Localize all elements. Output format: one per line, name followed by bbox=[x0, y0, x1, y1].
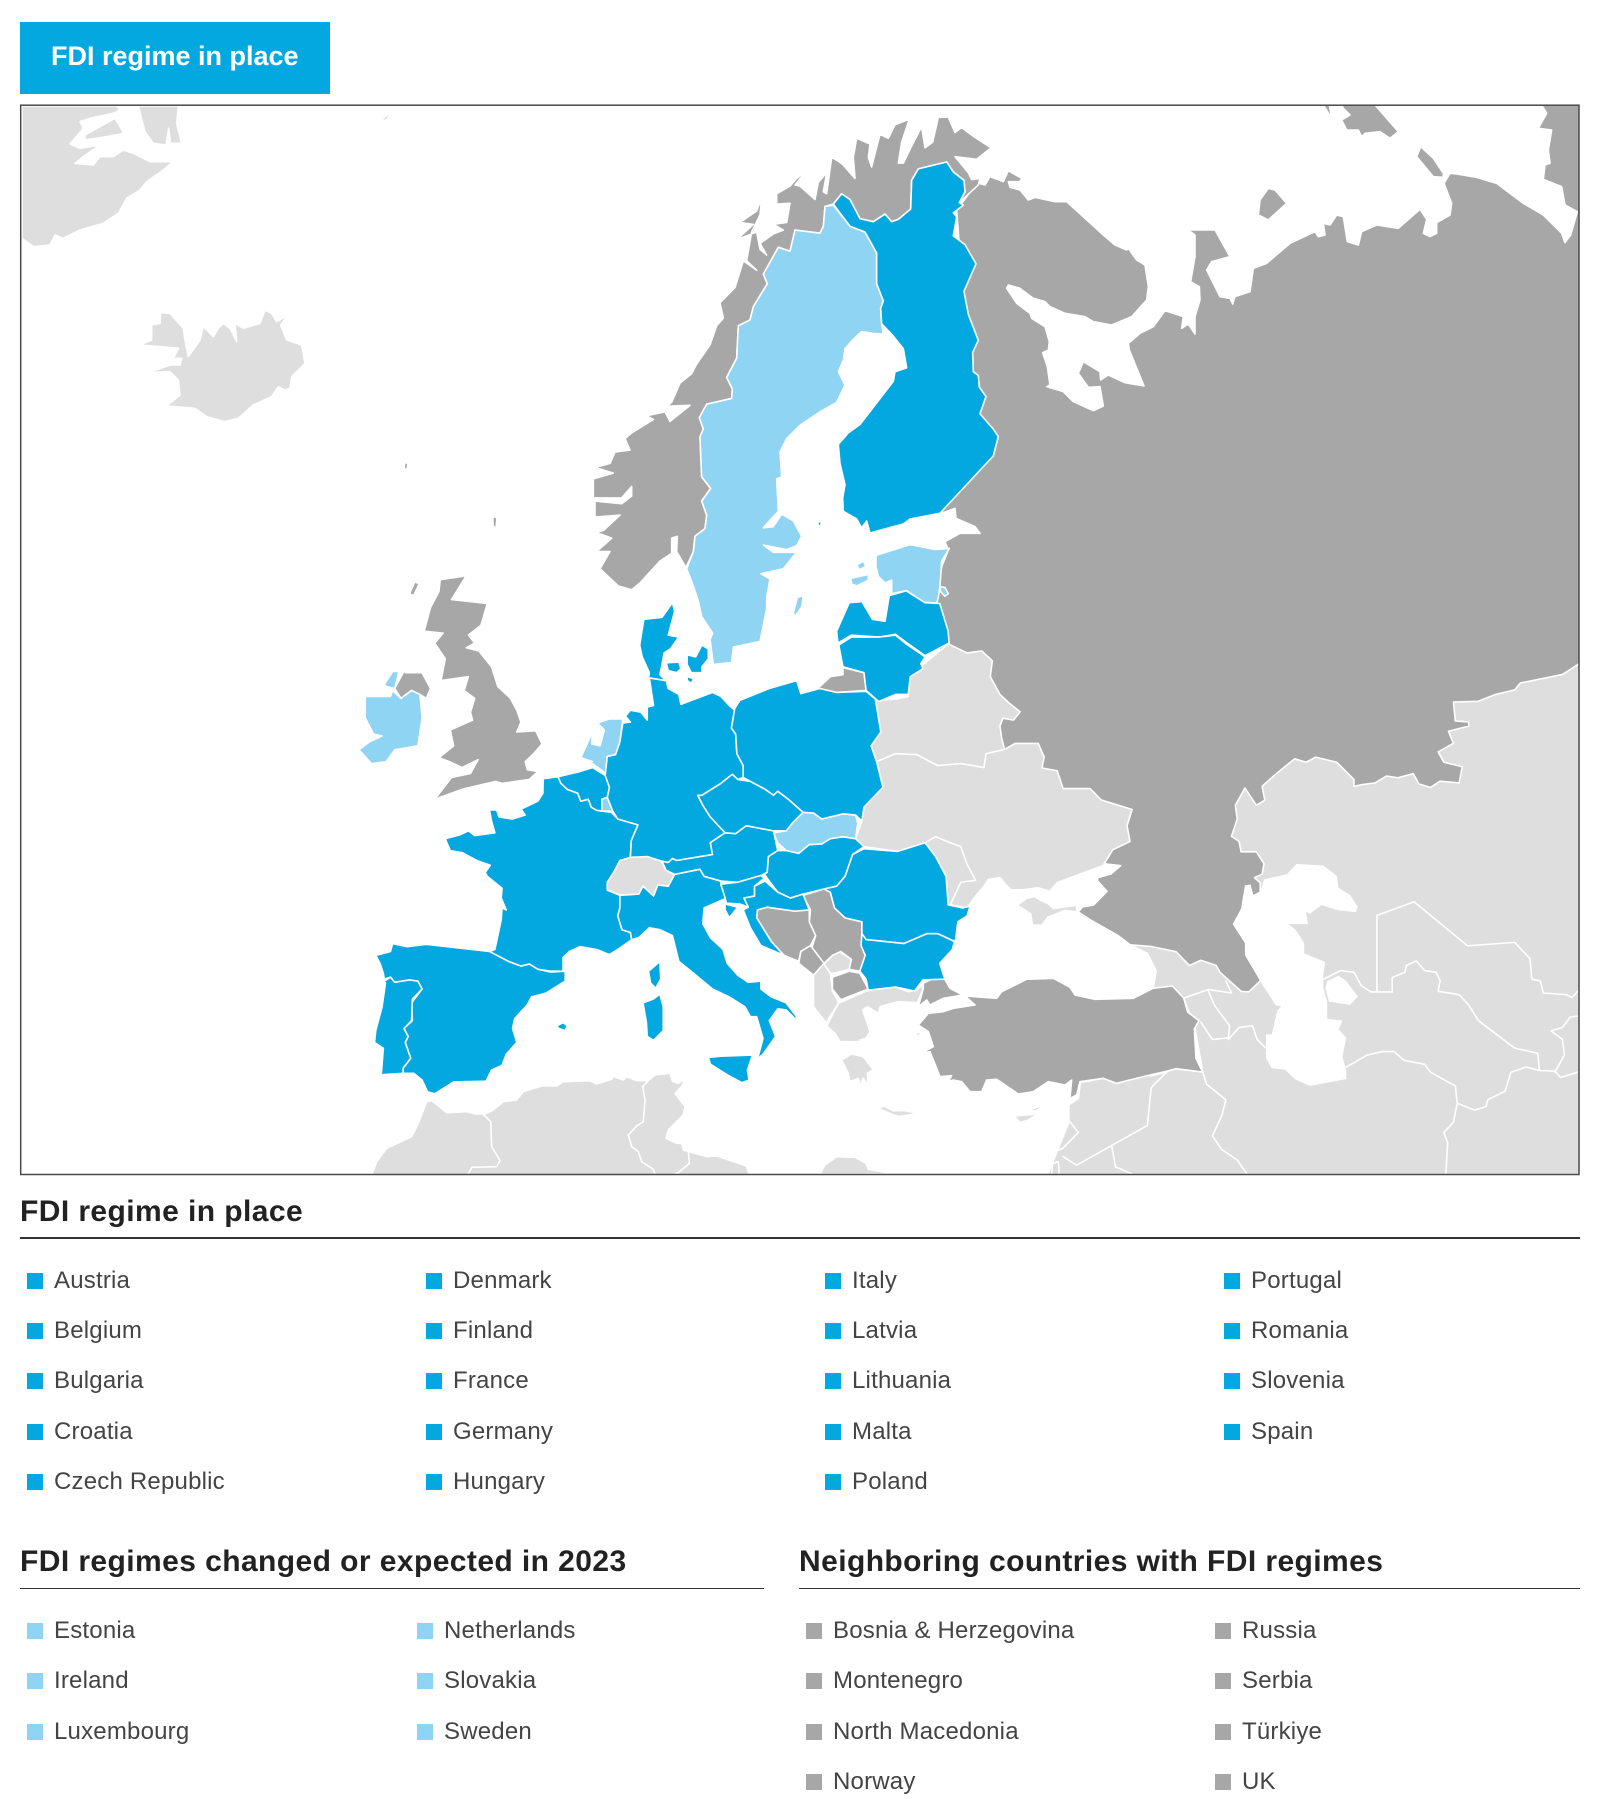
country: Romania bbox=[824, 843, 970, 944]
country: UK bbox=[424, 576, 542, 799]
item: Denmark: Denmark bbox=[453, 1267, 552, 1294]
UK: Hebrides bbox=[410, 582, 418, 594]
country: Luxembourg bbox=[602, 797, 613, 811]
country: Russia bbox=[937, 105, 1579, 1000]
lake: Peipus bbox=[940, 587, 948, 596]
item: Netherlands: Netherlands bbox=[444, 1617, 576, 1644]
country: Belgium bbox=[558, 768, 609, 811]
Ireland: Donegal bbox=[385, 672, 398, 688]
section heading: FDI regime in place: FDI regime in place bbox=[20, 1195, 303, 1228]
item: Slovenia: Slovenia bbox=[1251, 1367, 1345, 1394]
country: Latvia bbox=[837, 591, 949, 656]
Spain: Balearic Islands bbox=[557, 1023, 567, 1031]
Denmark: Zealand bbox=[687, 645, 708, 673]
item: Ireland: Ireland bbox=[54, 1667, 129, 1694]
country: Sweden bbox=[687, 205, 883, 664]
country: Austria bbox=[662, 826, 778, 882]
item: Russia: Russia bbox=[1242, 1617, 1317, 1644]
Sweden: Gotland bbox=[794, 596, 802, 615]
item: France: France bbox=[453, 1367, 529, 1394]
region: Kazakhstan, Central Asia, Caucasus and Middle East bbox=[1048, 663, 1580, 1174]
country: Slovakia bbox=[774, 812, 858, 853]
item: Montenegro: Montenegro bbox=[833, 1667, 963, 1694]
FDI regime in place: EU member states bbox=[375, 591, 970, 1094]
peninsula: Crimea bbox=[1017, 897, 1077, 925]
item: Malta bbox=[825, 1418, 912, 1445]
country: Serbia bbox=[803, 889, 865, 971]
country: Denmark bbox=[640, 603, 679, 681]
item: Slovakia: Slovakia bbox=[444, 1667, 536, 1694]
Greenland bbox=[22, 106, 392, 247]
Denmark: Lolland bbox=[687, 677, 694, 683]
item: Germany: Germany bbox=[453, 1418, 553, 1445]
country: Bosnia and Herzegovina bbox=[757, 907, 816, 961]
item: Finland: Finland bbox=[453, 1317, 533, 1344]
France: Corsica bbox=[649, 961, 661, 988]
section heading: Neighboring countries with FDI regimes: Neighboring countries with FDI regimes bbox=[799, 1545, 1383, 1578]
item: Latvia: Latvia bbox=[852, 1317, 917, 1344]
country: Poland bbox=[731, 681, 883, 821]
item: Bulgaria: Bulgaria bbox=[54, 1367, 144, 1394]
islands: Faroe and Shetland bbox=[404, 462, 497, 528]
Russia: Kaliningrad bbox=[820, 668, 865, 692]
country: Lithuania bbox=[839, 635, 925, 702]
legend: Neighboring countries with FDI regimes bbox=[806, 1617, 1322, 1795]
Estonia: Saaremaa bbox=[852, 576, 868, 586]
borders: Levant bbox=[1052, 1162, 1059, 1174]
country: Portugal bbox=[375, 977, 422, 1075]
map of Europe bbox=[20, 104, 1580, 1176]
country: France bbox=[445, 777, 638, 971]
Estonia: Hiiumaa bbox=[858, 562, 865, 569]
country: Estonia bbox=[876, 545, 949, 603]
country: Czech Republic bbox=[698, 774, 803, 834]
neighboring countries with regime: UK, Serbia, Bosnia, Montenegro, North Macedonia, Kaliningrad bbox=[395, 576, 868, 1000]
country: North Macedonia bbox=[832, 971, 868, 1000]
Denmark: Funen bbox=[666, 662, 681, 673]
Italy: Sardinia bbox=[643, 994, 663, 1040]
item: Croatia: Croatia bbox=[54, 1418, 133, 1445]
country: Netherlands bbox=[582, 720, 622, 772]
countries without regime: Switzerland, Kosovo, Albania bbox=[607, 857, 851, 1023]
FDI changed or expected: Sweden and Estonia bbox=[687, 205, 949, 664]
item: Romania: Romania bbox=[1251, 1317, 1348, 1344]
lake: Caspian Sea bbox=[1233, 864, 1358, 1086]
item: UK: UK bbox=[1242, 1768, 1276, 1795]
country: Montenegro bbox=[799, 946, 824, 975]
Italy: Sicily bbox=[708, 1055, 752, 1083]
divider bbox=[20, 1588, 764, 1589]
item: Portugal: Portugal bbox=[1251, 1267, 1342, 1294]
section heading: FDI regimes changed or expected in 2023: FDI regimes changed or expected in 2023 bbox=[20, 1545, 627, 1578]
item: Belgium: Belgium bbox=[54, 1317, 142, 1344]
item: Türkiye: Türkiye bbox=[1242, 1718, 1322, 1745]
item: Sweden: Sweden bbox=[444, 1718, 532, 1745]
country: Croatia bbox=[743, 881, 809, 955]
Croatia: Istria bbox=[725, 904, 738, 918]
countries without regime: Belarus, Ukraine, Moldova bbox=[856, 644, 1132, 908]
item: Spain bbox=[1224, 1418, 1313, 1445]
islands and eastern Mediterranean: Greece, Crete, Cyprus, Egypt bbox=[820, 985, 1046, 1174]
country: Slovenia bbox=[721, 876, 764, 907]
item: Luxembourg: Luxembourg bbox=[54, 1718, 189, 1745]
item: Spain: Spain bbox=[1251, 1418, 1313, 1445]
item: Bosnia & Herzegovina: Bosnia & Herzegovina bbox=[833, 1617, 1074, 1644]
item: Serbia: Serbia bbox=[1242, 1667, 1313, 1694]
Iceland bbox=[140, 310, 305, 422]
item: Italy: Italy bbox=[852, 1267, 897, 1294]
item: Poland: Poland bbox=[852, 1468, 928, 1495]
item: Hungary: Hungary bbox=[453, 1468, 545, 1495]
North Africa bbox=[372, 1073, 749, 1175]
item: Austria: Austria bbox=[54, 1267, 130, 1294]
country: Germany bbox=[605, 678, 743, 862]
country: Hungary bbox=[764, 837, 864, 898]
item: Norway: Norway bbox=[833, 1768, 916, 1795]
FDI regime in place: Finland bbox=[817, 162, 998, 533]
country: Ireland bbox=[359, 690, 422, 764]
title badge bbox=[20, 22, 330, 94]
country: Bulgaria bbox=[860, 934, 954, 991]
item: Lithuania: Lithuania bbox=[852, 1367, 951, 1394]
country: Italy bbox=[618, 869, 797, 1059]
legend: FDI regimes changed or expected in 2023 bbox=[27, 1617, 576, 1745]
FDI changed or expected: Ireland, Netherlands, Slovakia, Luxembourg bbox=[359, 672, 858, 853]
country: Turkiye bbox=[918, 978, 1203, 1098]
islands: Novaya Zemlya and Vaygach bbox=[1323, 105, 1443, 177]
item: Malta: Malta bbox=[852, 1418, 912, 1445]
item: Italy bbox=[825, 1267, 897, 1294]
legend: FDI regime in place bbox=[27, 1267, 1348, 1495]
country: Norway bbox=[593, 117, 991, 590]
divider bbox=[799, 1588, 1580, 1589]
item: Czech Republic: Czech Republic bbox=[54, 1468, 225, 1495]
country: Spain bbox=[376, 944, 565, 1094]
divider bbox=[20, 1237, 1580, 1239]
borders: Central Asia and Middle East bbox=[1048, 902, 1578, 1174]
title badge: FDI regime in place bbox=[51, 41, 299, 71]
item: Estonia: Estonia bbox=[54, 1617, 135, 1644]
UK: Northern Ireland bbox=[396, 672, 430, 698]
item: UK bbox=[1215, 1768, 1276, 1795]
map frame bbox=[21, 105, 1579, 1175]
borders: North Africa bbox=[468, 1081, 689, 1174]
item: North Macedonia: North Macedonia bbox=[833, 1718, 1019, 1745]
